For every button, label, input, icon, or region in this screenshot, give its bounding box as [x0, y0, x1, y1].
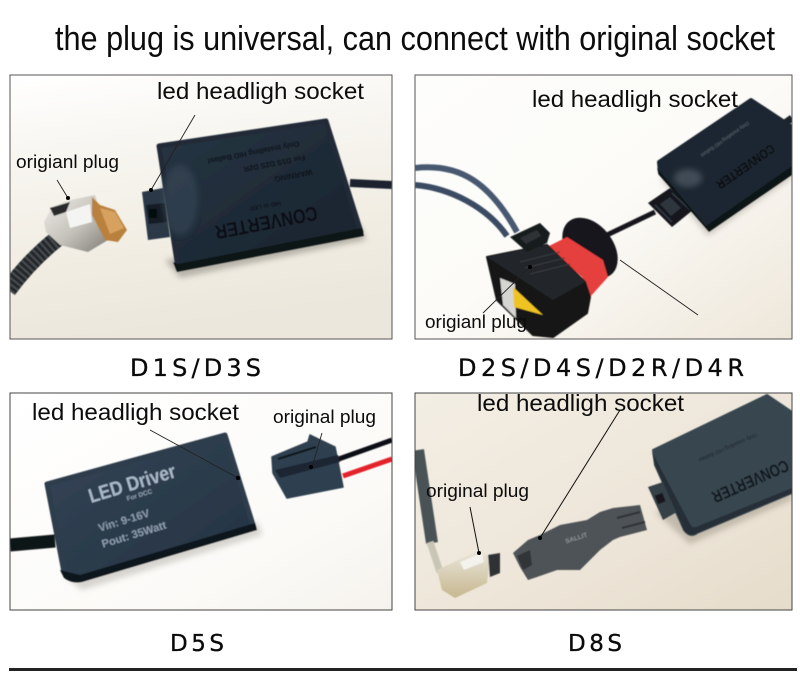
pointer: socket: [149, 115, 195, 192]
photo: converter and original plug: WARNING: [274, 167, 313, 184]
photo: LED driver and plug: Vin: 9-16V: [97, 507, 152, 535]
panel: D1S/D3S photo: [8, 75, 392, 339]
label: origianl plug: origianl plug: [16, 151, 119, 172]
panel: D8S photo: [415, 390, 792, 610]
photo background: [415, 75, 792, 339]
pointer: socket: [150, 430, 240, 480]
photo: converter and bulb plug: Only Installing HID Ballast: [699, 120, 750, 158]
caption: D5S: D5S: [170, 631, 224, 657]
label: led headligh socket: led headligh socket: [157, 78, 365, 104]
label: origianl plug: origianl plug: [425, 311, 527, 332]
pointer: plug: [309, 433, 322, 469]
label: original plug: original plug: [273, 406, 376, 427]
label: led headligh socket: led headligh socket: [32, 399, 240, 425]
photo: LED driver and plug: [10, 435, 392, 590]
panel: D2S/D4S/D2R/D4R photo: [415, 75, 792, 339]
photo: converter and original plug: Only Installing HID Ballast: [206, 139, 300, 166]
caption: D8S: D8S: [568, 631, 622, 657]
photo: LED driver and plug: For DCC: [126, 488, 153, 503]
photo: converter, adapter and plug: Only Installing HID Ballast: [697, 431, 758, 463]
panel border: [10, 393, 392, 610]
photo background: [10, 75, 392, 339]
pointer: original plug: [470, 507, 481, 555]
photo: converter and bulb plug: CONVERTER: [713, 141, 778, 193]
label: led headligh socket: led headligh socket: [532, 86, 739, 112]
photo: converter, adapter and plug: [418, 395, 792, 598]
pointer: adapter socket: [538, 410, 620, 540]
photo background: [415, 393, 792, 610]
caption: D1S/D3S: D1S/D3S: [130, 354, 261, 382]
photo: converter, adapter and plug: SALLIT: [565, 532, 588, 545]
panel border: [10, 75, 392, 339]
photo: LED driver and plug: LED Driver: [86, 461, 179, 508]
label: led headligh socket: led headligh socket: [477, 390, 685, 416]
label: original plug: original plug: [426, 480, 529, 501]
panel: D5S photo: [10, 393, 392, 610]
photo: converter and bulb plug: [415, 100, 792, 337]
photo background: [10, 393, 392, 610]
photo: converter and original plug: [8, 121, 392, 290]
pointer: bulb collar: [620, 260, 698, 315]
photo: converter and original plug: CONVERTER: [213, 201, 319, 243]
photo: converter and original plug: HID to LED: [249, 199, 281, 211]
pointer: original plug: [483, 265, 532, 313]
panel border: [415, 393, 792, 610]
photo: LED driver and plug: Pout: 35Watt: [100, 520, 168, 551]
caption: D2S/D4S/D2R/D4R: D2S/D4S/D2R/D4R: [458, 354, 744, 382]
panel border: [415, 75, 792, 339]
photo: converter and original plug: For D1S D2S D2R: [242, 153, 306, 174]
photo: converter, adapter and plug: CONVERTER: [709, 456, 792, 506]
pointer: plug: [57, 180, 70, 200]
